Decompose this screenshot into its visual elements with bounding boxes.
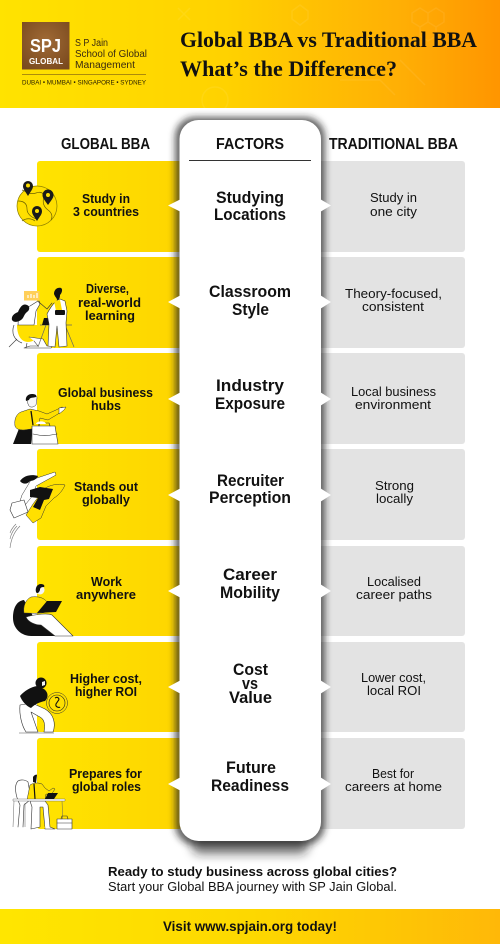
seated student [9, 301, 52, 348]
icon: classroom discussion [9, 288, 74, 348]
traditional BBA card text: career paths [356, 587, 433, 602]
footer banner [0, 909, 500, 944]
traditional BBA card text: Best for [372, 766, 415, 781]
factor names: Classroom [209, 283, 291, 301]
factor names [209, 189, 291, 795]
factors panel [168, 120, 331, 841]
factor names: Cost [233, 661, 268, 679]
factor names: Future [226, 759, 276, 777]
icon: globe with pins [17, 181, 57, 226]
traditional BBA card text [345, 190, 442, 794]
title: What’s the Difference? [180, 56, 397, 81]
traditional BBA cards [318, 161, 465, 829]
column heading: traditional BBA: TRADITIONAL BBA [329, 136, 458, 153]
global BBA card text: Higher cost, [70, 671, 142, 686]
global BBA card text: 3 countries [73, 204, 139, 219]
call to action text: Start your Global BBA journey with SP Jain Global. [108, 879, 397, 894]
traditional BBA card text: consistent [362, 299, 424, 314]
traditional BBA card text: Strong [375, 478, 414, 493]
factor names: Locations [214, 206, 286, 224]
traditional BBA card text: locally [376, 491, 414, 506]
global BBA card text: Prepares for [69, 766, 142, 781]
traditional BBA card text: Local business [351, 384, 436, 399]
factors heading: FACTORS [216, 136, 284, 153]
icon: woman riding rocket [10, 472, 65, 548]
logo: GLOBAL [29, 57, 63, 66]
call to action text: Ready to study business across global cities? [108, 864, 397, 879]
traditional BBA card text: one city [370, 204, 418, 219]
traditional BBA card text: environment [355, 397, 431, 412]
title: Global BBA vs Traditional BBA [180, 27, 478, 52]
factor names: Recruiter [217, 472, 285, 490]
icon: man holding coin [19, 678, 68, 733]
global BBA card text: Study in [82, 191, 130, 206]
factors panel shadow [175, 117, 325, 854]
global BBA card text: Work [91, 574, 123, 589]
logo: SPJ [30, 36, 61, 56]
factor names: Style [232, 301, 269, 319]
global BBA cards [37, 161, 182, 829]
traditional BBA card text: Theory-focused, [345, 286, 442, 301]
global BBA card text [58, 191, 153, 794]
logo: DUBAI • MUMBAI • SINGAPORE • SYDNEY [22, 80, 146, 86]
factor names: Value [229, 689, 272, 707]
factor names: Perception [209, 489, 291, 507]
icon: remote worker on beanbag [13, 584, 73, 636]
standing teacher [39, 288, 67, 347]
logo: School of Global [75, 49, 147, 60]
logo [22, 22, 147, 86]
global BBA card text: hubs [91, 398, 121, 413]
traditional BBA card text: Lower cost, [361, 670, 426, 685]
factor names: Mobility [220, 584, 281, 602]
global BBA card text: learning [85, 308, 135, 323]
icon: man with briefcase [13, 394, 66, 444]
traditional BBA card text: careers at home [345, 779, 442, 794]
factor names: Exposure [215, 395, 285, 413]
traditional BBA card text: local ROI [367, 683, 421, 698]
footer banner: Visit www.spjain.org today! [163, 918, 337, 934]
global BBA card text: anywhere [76, 587, 136, 602]
header banner [0, 0, 500, 113]
global BBA card text: Diverse, [86, 281, 129, 296]
global BBA card text: higher ROI [75, 684, 137, 699]
title [180, 27, 478, 81]
column heading: global BBA: GLOBAL BBA [61, 136, 150, 153]
desk and laptop [38, 318, 74, 347]
factor names: Career [223, 566, 278, 584]
call to action text [108, 864, 397, 894]
factor names: Studying [216, 189, 284, 207]
logo: Management [75, 60, 135, 71]
factor names: vs [242, 675, 258, 693]
global BBA card text: globally [82, 492, 131, 507]
traditional BBA card text: Study in [370, 190, 417, 205]
global BBA card text: real-world [78, 295, 141, 310]
global BBA card text: global roles [72, 779, 141, 794]
factor names: Readiness [211, 777, 289, 795]
traditional BBA card text: Localised [367, 574, 421, 589]
global BBA card text: Global business [58, 385, 153, 400]
icon: man working at desk [13, 775, 72, 829]
factor names: Industry [216, 377, 285, 395]
logo: S P Jain [75, 38, 108, 49]
global BBA card text: Stands out [74, 479, 139, 494]
